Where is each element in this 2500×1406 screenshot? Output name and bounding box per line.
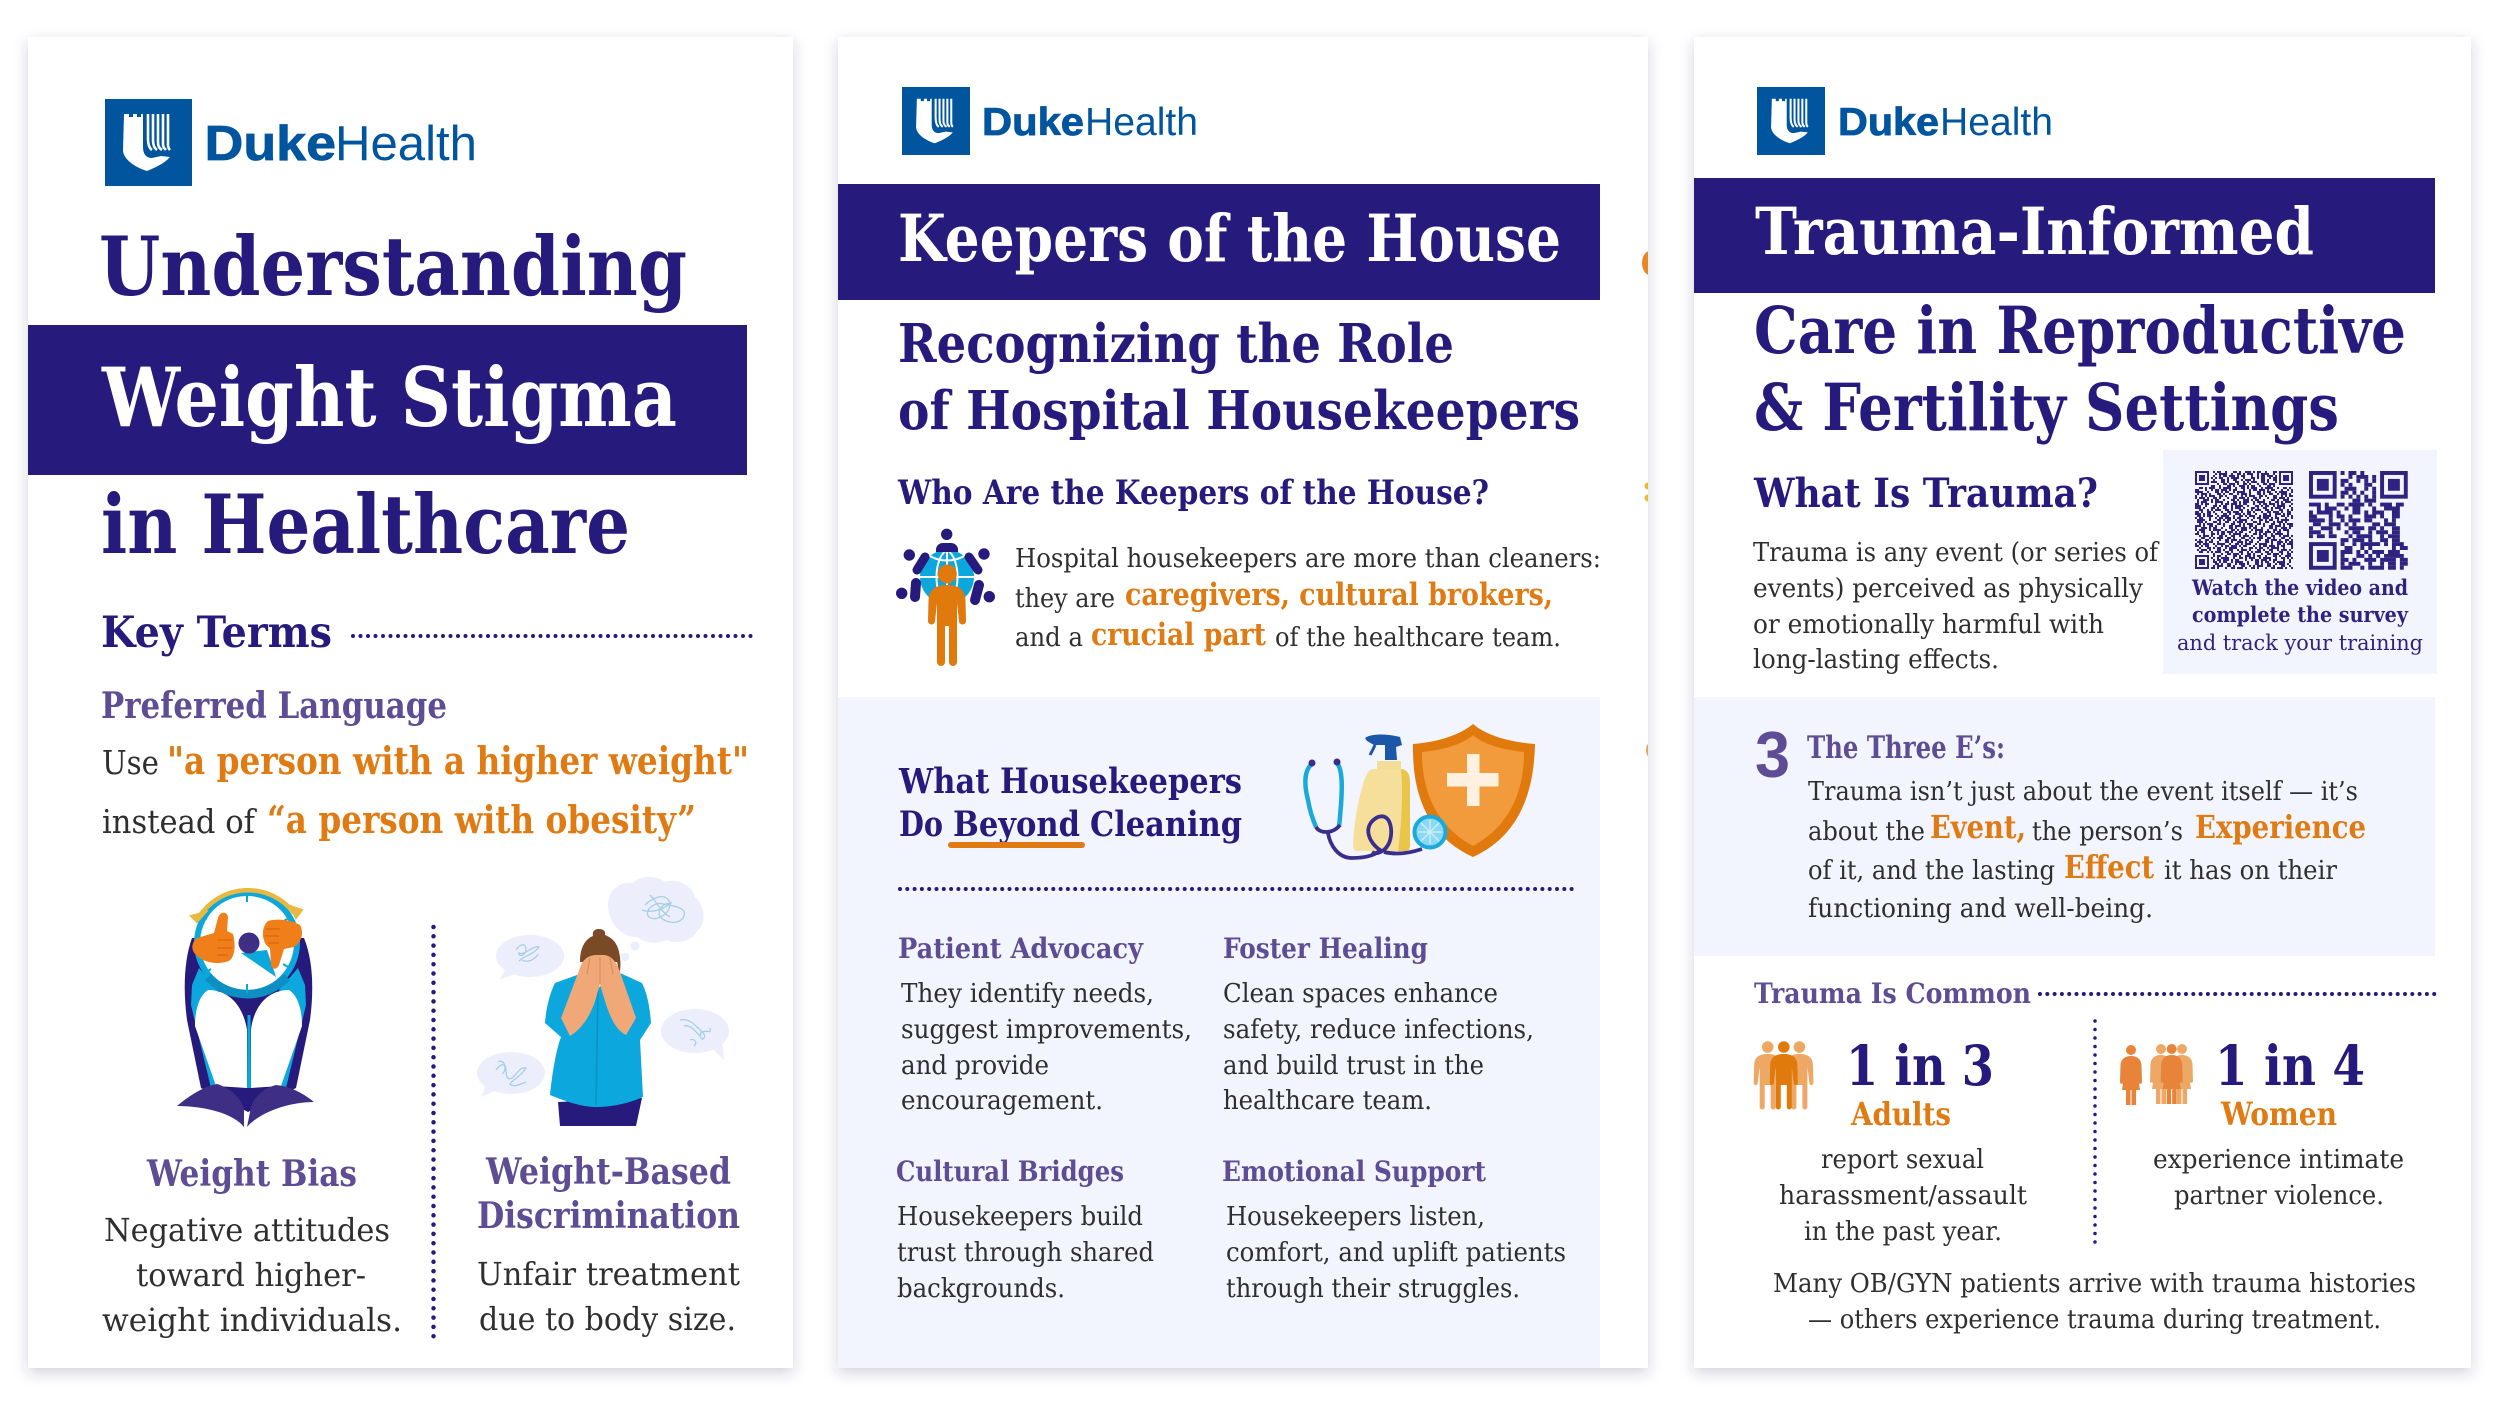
stat: 1 in 4 women: [2153, 1033, 2404, 1211]
text: closing note: — others experience trauma during treatment.: [1808, 1305, 2381, 1335]
card background: [28, 37, 793, 1368]
term: Weight-Based Discrimination: Unfair treatment: [477, 1255, 740, 1293]
stat: 1 in 3 adults: 1 in 3: [1846, 1033, 1994, 1098]
title banner: [28, 325, 747, 475]
QR code: video: [2195, 471, 2293, 569]
text: who housekeepers are: and a: [1015, 623, 1083, 653]
stat: 1 in 4 women: experience intimate: [2153, 1145, 2404, 1175]
title continuation: [1754, 293, 2406, 446]
heading: Preferred Language: Preferred Language: [101, 685, 447, 727]
text: trauma definition: Trauma is any event (or series of: [1753, 538, 2160, 568]
stat: 1 in 3 adults: [1779, 1033, 2028, 1247]
icon: women: [2120, 1044, 2193, 1105]
stat: 1 in 3 adults: report sexual: [1821, 1145, 1984, 1175]
title banner: [1694, 178, 2435, 293]
text: three Es explanation: functioning and well-being.: [1808, 894, 2153, 924]
subtitle: of Hospital Housekeepers: [898, 380, 1580, 442]
item: Cultural Bridges: backgrounds.: [897, 1274, 1065, 1304]
title banner: Trauma-Informed: [1755, 194, 2314, 270]
item: Foster Healing: and build trust in the: [1223, 1051, 1484, 1081]
heading: What Housekeepers Do Beyond Cleaning: Do: [899, 804, 943, 845]
text: who housekeepers are: of the healthcare team.: [1275, 623, 1561, 653]
item: Patient Advocacy: suggest improvements,: [901, 1015, 1192, 1045]
stat: 1 in 4 women: partner violence.: [2174, 1181, 2384, 1211]
icon: stethoscope, spray bottle and shield: [1305, 724, 1535, 858]
stat: 1 in 4 women: Women: [2220, 1095, 2337, 1133]
heading: What Housekeepers Do Beyond Cleaning: [898, 761, 1242, 848]
text: trauma definition: events) perceived as physically: [1753, 574, 2143, 604]
text: closing note: [1773, 1269, 2416, 1335]
item: Patient Advocacy: and provide: [901, 1051, 1049, 1081]
text: use a person with a higher weight: Use: [102, 743, 159, 782]
item: Emotional Support: comfort, and uplift patients: [1226, 1238, 1566, 1268]
term: Weight-Based Discrimination: Discrimination: [477, 1195, 740, 1237]
item: Foster Healing: safety, reduce infections,: [1223, 1015, 1534, 1045]
text: instead of a person with obesity: [102, 797, 696, 842]
subtitle: [898, 313, 1580, 442]
stat: 1 in 3 adults: harassment/assault: [1779, 1181, 2028, 1211]
logo: Duke Health: [105, 99, 477, 186]
text: who housekeepers are: crucial part: [1091, 617, 1267, 653]
QR caption: and track your training: [2177, 631, 2423, 656]
term: Weight Bias: [102, 1153, 402, 1339]
logo: Duke Health: Health: [335, 117, 477, 171]
text: instead of a person with obesity: “a person with obesity”: [267, 797, 696, 842]
text: three Es explanation: Trauma isn’t just about the event itself — it’s: [1808, 777, 2358, 807]
text: trauma definition: long-lasting effects.: [1753, 645, 1999, 675]
item: Cultural Bridges: Housekeepers build: [897, 1202, 1143, 1232]
heading: What Housekeepers Do Beyond Cleaning: Cleaning: [1090, 804, 1242, 845]
divider: vertical dotted: [431, 927, 436, 1341]
item: Emotional Support: Housekeepers listen,: [1226, 1202, 1485, 1232]
edge fragments of neighbouring art: [1642, 251, 1648, 756]
text: trauma definition: [1753, 538, 2160, 675]
text: who housekeepers are: they are: [1015, 584, 1115, 614]
text: three Es explanation: it has on their: [2164, 856, 2338, 886]
heading: The Three Es: The Three E’s:: [1807, 730, 2005, 766]
panel: weight stigma card: [28, 37, 793, 1368]
item: Foster Healing: Foster Healing: [1223, 932, 1428, 965]
title banner: [838, 184, 1600, 300]
logo: Duke Health: Duke: [204, 117, 336, 171]
term: Weight Bias: toward higher-: [136, 1256, 366, 1294]
term: Weight-Based Discrimination: due to body size.: [479, 1300, 736, 1338]
text: three Es explanation: the person’s: [2032, 817, 2183, 847]
item: Foster Healing: Clean spaces enhance: [1223, 979, 1498, 1009]
card background: [838, 37, 1648, 1368]
stat: 1 in 3 adults: Adults: [1850, 1095, 1951, 1133]
heading: What Is Trauma: What Is Trauma?: [1753, 470, 2098, 517]
text: who housekeepers are: [1015, 544, 1601, 653]
number 3: 3: [1755, 718, 1790, 791]
title banner: Keepers of the House: [898, 201, 1561, 277]
text: three Es explanation: Effect: [2064, 848, 2154, 886]
text: use a person with a higher weight: "a person with a higher weight": [167, 738, 749, 783]
text: instead of a person with obesity: instead of: [102, 802, 258, 841]
QR caption: [2177, 576, 2423, 656]
heading: What Housekeepers Do Beyond Cleaning: Beyond: [953, 804, 1080, 845]
item: Patient Advocacy: Patient Advocacy: [898, 932, 1144, 965]
panel: trauma-informed care card: [1694, 37, 2471, 1368]
text: who housekeepers are: Hospital housekeepers are more than cleaners:: [1015, 544, 1601, 574]
text: three Es explanation: Event,: [1930, 808, 2026, 846]
item: Cultural Bridges: trust through shared: [897, 1238, 1154, 1268]
stat: 1 in 3 adults: in the past year.: [1804, 1217, 2002, 1247]
stat: 1 in 4 women: 1 in 4: [2215, 1033, 2365, 1098]
card background: [1694, 37, 2471, 1368]
term: Weight-Based Discrimination: Weight-Based: [485, 1151, 731, 1193]
logo: Duke Health: Health: [1085, 101, 1198, 144]
heading: Key Terms: Key Terms: [101, 608, 332, 658]
icon: weight scale with thumbs: [177, 890, 314, 1127]
item: Cultural Bridges: Cultural Bridges: [896, 1155, 1124, 1188]
QR caption: complete the survey: [2192, 603, 2408, 628]
panel: what housekeepers do: [838, 697, 1600, 1368]
item: Cultural Bridges: [896, 1155, 1154, 1304]
item: Emotional Support: Emotional Support: [1222, 1155, 1486, 1188]
text: three Es explanation: [1808, 777, 2366, 924]
item: Patient Advocacy: They identify needs,: [901, 979, 1154, 1009]
item: Emotional Support: [1222, 1155, 1566, 1304]
title line: in Healthcare: in Healthcare: [101, 478, 630, 573]
logo: Duke Health: [902, 87, 1198, 155]
icon: person with globe and community: [896, 529, 995, 666]
divider: vertical dotted: [2093, 1021, 2097, 1247]
item: Emotional Support: through their struggles.: [1226, 1274, 1520, 1304]
text: three Es explanation: about the: [1808, 817, 1925, 847]
title line: Understanding: Understanding: [99, 220, 687, 315]
text: three Es explanation: of it, and the lasting: [1808, 856, 2055, 886]
heading: What Housekeepers Do Beyond Cleaning: What Housekeepers: [898, 761, 1242, 802]
text: three Es explanation: Experience: [2195, 808, 2366, 846]
term: Weight Bias: Negative attitudes: [104, 1211, 390, 1249]
heading: Trauma Is Common: Trauma Is Common: [1754, 977, 2031, 1010]
divider dots: [900, 887, 1573, 891]
logo: Duke Health: Duke: [1838, 101, 1939, 144]
QR caption: Watch the video and: [2191, 576, 2408, 601]
item: Patient Advocacy: encouragement.: [901, 1086, 1103, 1116]
logo: Duke Health: Duke: [982, 101, 1084, 144]
text: who housekeepers are: caregivers, cultural brokers,: [1125, 577, 1553, 613]
item: Patient Advocacy: [898, 932, 1192, 1116]
panel: the three Es: [1694, 697, 2435, 956]
term: Weight-Based Discrimination: [477, 1151, 740, 1338]
icon: three adults: [1754, 1041, 1813, 1110]
title banner: Weight Stigma: [101, 351, 677, 446]
heading: Who Are the Keepers: Who Are the Keepers of the House?: [897, 473, 1489, 513]
text: closing note: Many OB/GYN patients arrive with trauma histories: [1773, 1269, 2416, 1299]
term: Weight Bias: weight individuals.: [102, 1301, 402, 1339]
item: Foster Healing: [1223, 932, 1534, 1116]
callout: QR codes: [2163, 450, 2437, 674]
panel: keepers of the house card: [838, 37, 1660, 1368]
icon: woman covering face with speech bubbles: [477, 877, 729, 1126]
QR code: survey: [2309, 473, 2408, 568]
panel background: [838, 697, 1600, 1368]
logo: Duke Health: Health: [1940, 101, 2053, 144]
subtitle: Recognizing the Role: [898, 313, 1454, 375]
title continuation: & Fertility Settings: [1754, 370, 2339, 446]
text: trauma definition: or emotionally harmful with: [1753, 610, 2104, 640]
term: Weight Bias: Weight Bias: [146, 1153, 357, 1195]
item: Foster Healing: healthcare team.: [1223, 1086, 1432, 1116]
logo: Duke Health: [1757, 87, 2053, 155]
